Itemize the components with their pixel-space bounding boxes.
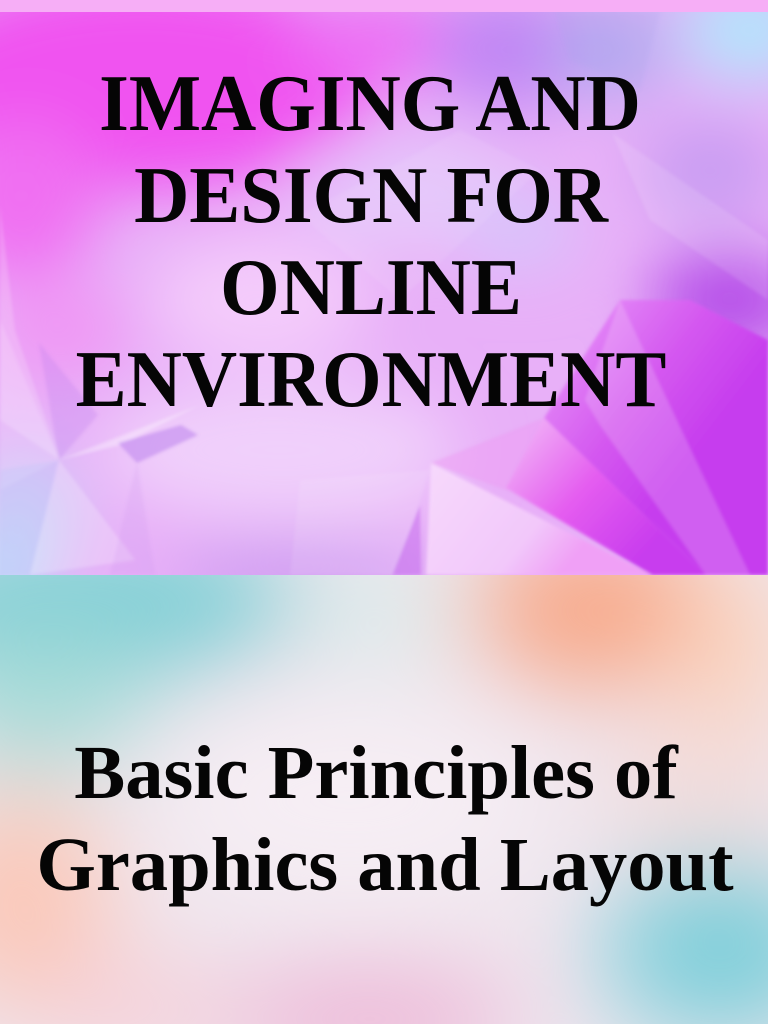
subtitle: Graphics and Layout bbox=[36, 822, 734, 907]
subtitle bbox=[36, 730, 734, 907]
panel: pastel blurred background bbox=[0, 575, 768, 1024]
top decorative strip bbox=[0, 0, 768, 12]
panel: polygon background bbox=[0, 0, 768, 620]
title: ENVIRONMENT bbox=[76, 334, 666, 423]
title bbox=[76, 58, 666, 423]
title: ONLINE bbox=[220, 242, 522, 331]
subtitle: Basic Principles of bbox=[74, 730, 679, 815]
title: IMAGING AND bbox=[99, 58, 641, 147]
title: DESIGN FOR bbox=[134, 150, 609, 239]
